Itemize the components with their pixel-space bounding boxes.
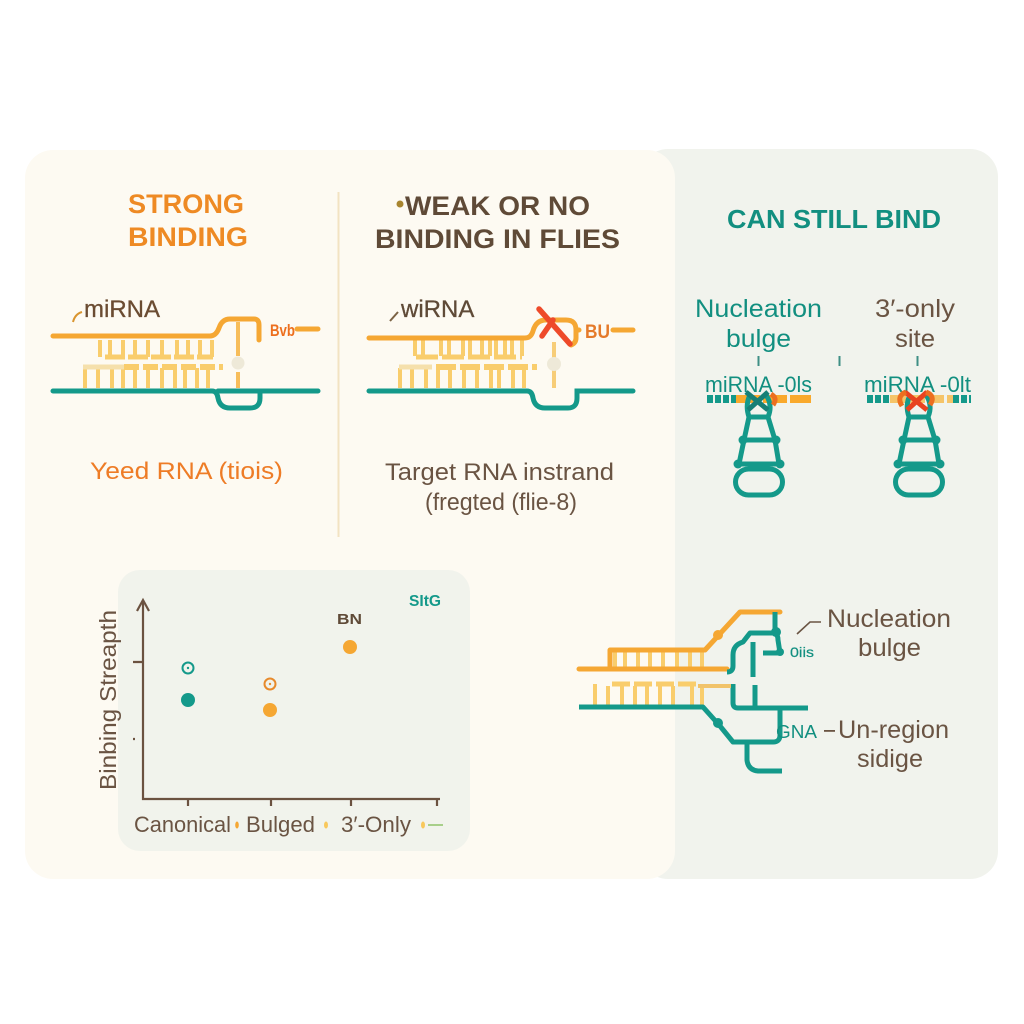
sublabel: miRNA -0ls [705,372,812,397]
callout: un-region sidge [824,716,949,773]
x axis labels: 3′-Only [341,812,411,837]
x axis labels: Canonical [134,812,231,837]
stem loop [736,395,782,495]
label [875,295,956,353]
column: 3'-only site [864,295,971,495]
base pairs [399,340,554,388]
heading: strong binding: STRONG [128,189,244,219]
teal stems [579,612,808,771]
diagram: bulged duplex [579,612,817,771]
diagram: weak binding duplex [369,296,633,408]
strand band [707,395,736,403]
label: site [895,325,935,353]
data points [181,693,195,707]
diagram: bulged duplex: GNA [776,722,817,742]
site label: Bvb [270,321,295,340]
heading: strong binding [128,189,248,252]
axis arrow [137,600,149,611]
column: nucleation bulge [695,295,822,495]
chart annotations: BN [337,611,362,628]
panel: can still bind background [640,149,998,879]
miRNA label: miRNA [84,296,160,323]
miRNA strand [579,612,780,669]
red cross [905,392,927,410]
callout: un-region sidge: sidige [857,745,923,773]
x axis labels: Bulged [246,812,315,837]
legend marks [235,822,443,828]
callout: un-region sidge: Un-region [838,716,949,744]
hinge bead [232,356,244,370]
target strand [53,391,318,408]
miRNA strand [53,319,318,340]
panel: binding strength chart: SItG [409,593,441,610]
label [695,295,822,353]
axes [133,602,440,806]
small labels: 0iis [790,644,814,660]
panel: strong and weak binding background [25,150,675,879]
callout: nucleation bulge: bulge [858,634,921,662]
hinge bead [547,357,561,371]
site label: BU [585,322,610,343]
cross [746,392,768,410]
red cross [539,309,570,344]
stem loop [896,395,942,495]
stem beads [713,630,723,640]
strand band [867,395,890,403]
caption: target RNA: Target RNA instrand [385,459,614,486]
target strand [369,391,633,408]
panel: binding strength chart [95,570,470,851]
caption: seed RNA: Yeed RNA (tiois) [90,458,283,485]
miRNA strand [369,320,633,345]
caption: target RNA [385,459,614,516]
separator tick [838,356,840,366]
miRNA label: wiRNA [400,296,474,323]
base pairs [83,322,238,388]
callout: nucleation bulge: Nucleation [827,605,951,633]
x axis labels [134,812,411,837]
heading: weak or no binding: BINDING IN FLIES [375,224,620,254]
label: Nucleation [695,295,822,323]
heading: weak or no binding [375,191,620,254]
base pairs [595,652,702,705]
diagram: strong binding duplex [53,296,318,408]
divider [338,192,340,537]
heading: weak or no binding: WEAK OR NO [405,191,590,221]
callout: nucleation bulge [797,605,951,662]
sublabel: miRNA -0lt [864,372,971,397]
caption: target RNA: (fregted (flie-8) [425,489,577,516]
y axis label: Binbing Streapth [95,610,121,790]
heading: can still bind: CAN STILL BIND [727,204,941,234]
label: bulge [726,325,791,353]
label: 3′-only [875,295,956,323]
heading: strong binding: BINDING [128,222,248,252]
